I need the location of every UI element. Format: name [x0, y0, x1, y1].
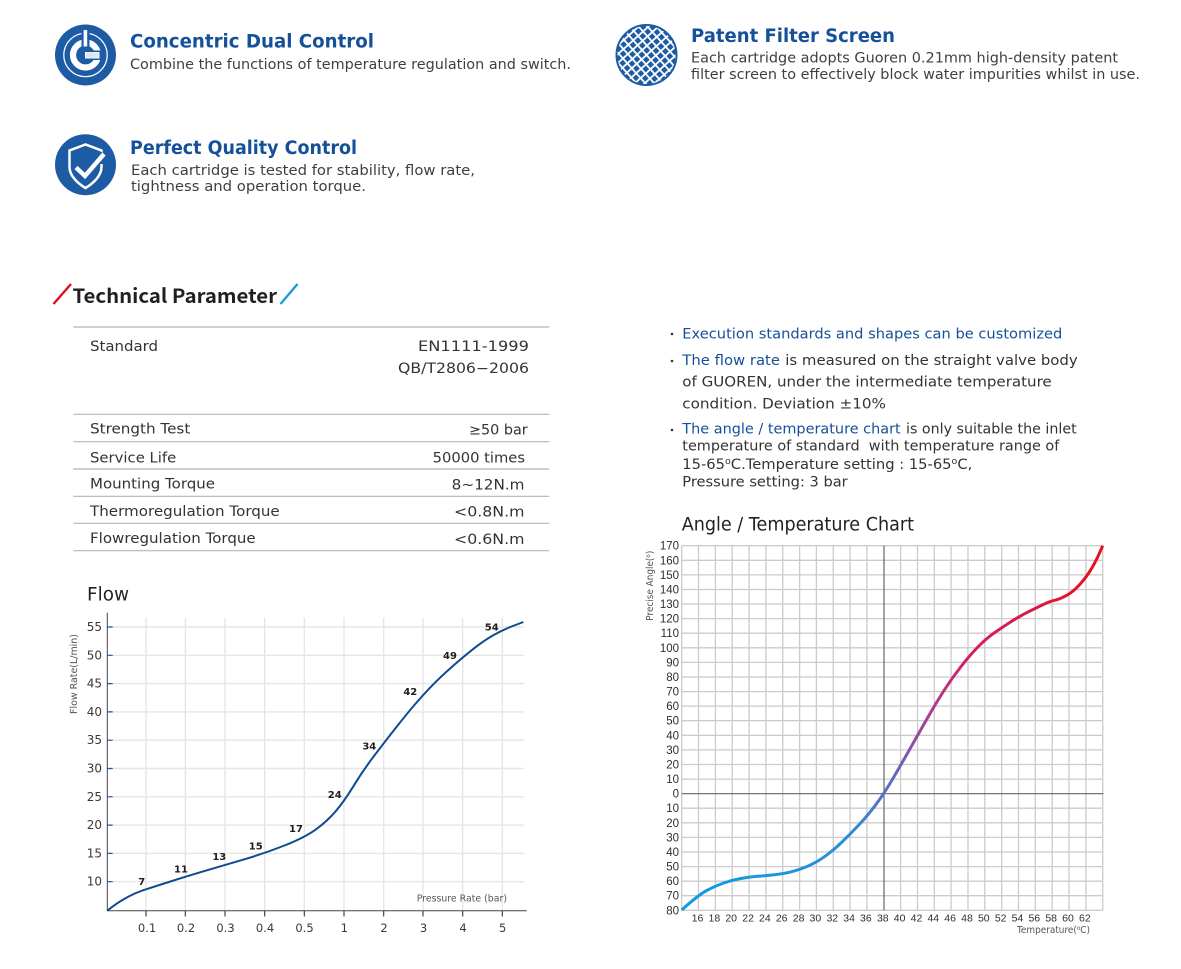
- data labels: 15: [249, 842, 263, 852]
- y axis labels: 40: [87, 705, 102, 719]
- x axis labels: 22: [742, 913, 754, 925]
- x axis labels: 46: [944, 913, 956, 925]
- table: technical parameters: <0.6N.m: [454, 532, 524, 548]
- x axis labels: 3: [420, 921, 427, 935]
- x axis labels: 58: [1045, 913, 1057, 925]
- y axis labels: 140: [660, 584, 679, 596]
- x axis labels: 30: [810, 913, 821, 925]
- y axis labels: 20: [666, 818, 679, 830]
- x axis title: o: [1077, 925, 1081, 932]
- notes list: is only suitable the inlet: [906, 422, 1077, 438]
- x axis labels: 4: [459, 921, 467, 935]
- y axis labels: 30: [87, 762, 102, 776]
- y axis labels: 20: [87, 818, 102, 832]
- notes list: is measured on the straight valve body: [785, 353, 1078, 369]
- notes list: Pressure setting: 3 bar: [682, 475, 848, 491]
- x axis labels: 28: [793, 913, 805, 925]
- notes list: The flow rate: [681, 353, 780, 369]
- y axis labels: 20: [666, 760, 679, 772]
- notes list: 15-65: [682, 457, 723, 473]
- y axis title: ): [645, 551, 656, 554]
- y axis labels: 15: [87, 846, 102, 860]
- icon: filter mesh: [616, 25, 676, 85]
- y axis labels: 10: [666, 774, 679, 786]
- x axis labels: 50: [978, 913, 990, 925]
- x axis labels: 54: [1012, 913, 1023, 925]
- notes list: Execution standards and shapes can be customized: [682, 326, 1062, 342]
- table: technical parameters: Mounting Torque: [90, 476, 215, 492]
- x axis labels: 52: [995, 913, 1007, 925]
- chart title: Angle / Temperature Chart: [682, 515, 914, 536]
- y axis labels: 35: [87, 733, 102, 747]
- y axis labels: 70: [666, 891, 679, 903]
- notes list: o: [952, 457, 958, 467]
- notes list: temperature of standard with temperature range of: [682, 439, 1060, 455]
- y axis labels: 25: [87, 790, 102, 804]
- y axis labels: 50: [87, 648, 102, 662]
- flow curve: [107, 622, 523, 911]
- y axis labels: 10: [666, 803, 679, 815]
- y axis labels: 10: [87, 875, 102, 889]
- x axis labels: 0.5: [295, 921, 314, 935]
- x axis labels: 26: [776, 913, 788, 925]
- notes list: of GUOREN, under the intermediate temperature: [682, 375, 1052, 391]
- x axis labels: 0.3: [216, 921, 235, 935]
- x axis labels: 0.1: [138, 921, 156, 935]
- y axis labels: 70: [666, 687, 679, 699]
- heading: Concentric Dual Control: [130, 32, 374, 52]
- y axis labels: 150: [660, 570, 679, 582]
- y axis labels: 110: [661, 628, 679, 640]
- feature: Perfect Quality Control: [55, 134, 475, 195]
- y axis labels: 40: [666, 730, 679, 742]
- x axis labels: 20: [725, 913, 737, 925]
- y axis title: Flow Rate(L/min): [69, 634, 80, 714]
- table: technical parameters: [73, 327, 549, 551]
- notes list: condition. Deviation ±10%: [682, 396, 886, 412]
- section title: Technical Parameter: Technical Parameter: [72, 280, 278, 309]
- feature: Patent Filter Screen: [616, 25, 1140, 85]
- data labels: 17: [289, 824, 303, 835]
- y axis labels: [660, 541, 679, 917]
- x axis labels: 1: [341, 921, 348, 935]
- x axis labels: 2: [380, 921, 388, 935]
- heading: Perfect Quality Control: [130, 138, 357, 159]
- notes list: The angle / temperature chart: [681, 422, 901, 438]
- y axis labels: 120: [660, 614, 679, 626]
- description: filter screen to effectively block water impurities whilst in use.: [691, 67, 1140, 83]
- y axis labels: 40: [666, 847, 679, 859]
- y axis title: o: [645, 554, 652, 558]
- x axis labels: 34: [843, 913, 855, 925]
- icon: shield with check mark: [55, 134, 116, 195]
- description: tightness and operation torque.: [131, 179, 366, 195]
- table: technical parameters: Thermoregulation Torque: [89, 504, 280, 520]
- table: technical parameters: 50000 times: [433, 450, 525, 466]
- data labels: 24: [328, 790, 342, 801]
- x axis labels: 38: [877, 913, 889, 925]
- x axis labels: 42: [911, 913, 922, 925]
- notes list: C,: [957, 457, 972, 473]
- x axis labels: 40: [894, 913, 906, 925]
- y axis labels: 160: [660, 555, 679, 567]
- x axis title: C): [1080, 925, 1090, 936]
- table: technical parameters: Standard: [90, 339, 158, 355]
- x axis labels: 62: [1079, 913, 1091, 925]
- table: technical parameters: Service Life: [90, 450, 176, 466]
- heading: Patent Filter Screen: [691, 26, 895, 47]
- x axis labels: 56: [1028, 913, 1040, 925]
- chart title: Flow: [87, 585, 129, 606]
- table: technical parameters: <0.8N.m: [454, 505, 524, 521]
- data labels: 11: [174, 864, 188, 876]
- data labels: 7: [138, 877, 145, 888]
- icon: concentric dual control: [55, 24, 116, 86]
- x axis labels: [138, 921, 506, 935]
- x axis labels: 0.2: [177, 921, 195, 935]
- data labels: 34: [362, 742, 376, 752]
- table: technical parameters: Flowregulation Torque: [90, 531, 256, 547]
- notes list: o: [725, 457, 731, 467]
- data labels: 49: [443, 651, 457, 662]
- y axis labels: 90: [666, 657, 679, 669]
- x axis labels: [692, 913, 1091, 925]
- y axis labels: 0: [673, 789, 679, 801]
- y axis labels: 80: [666, 905, 679, 917]
- angle curve: [682, 546, 1103, 910]
- y axis labels: [87, 620, 102, 889]
- description: Combine the functions of temperature regulation and switch.: [130, 57, 571, 73]
- description: Each cartridge adopts Guoren 0.21mm high-density patent: [691, 50, 1119, 66]
- data labels: 54: [485, 622, 499, 634]
- data labels: 13: [212, 852, 226, 863]
- y axis labels: 50: [666, 716, 679, 728]
- chart: Flow: [69, 585, 527, 935]
- y axis labels: 60: [666, 876, 679, 888]
- y axis labels: 45: [87, 677, 102, 691]
- x axis labels: 48: [961, 913, 973, 925]
- x axis labels: 18: [709, 913, 720, 925]
- description: Each cartridge is tested for stability, flow rate,: [131, 163, 475, 179]
- x axis labels: 44: [927, 913, 939, 925]
- table: technical parameters: Strength Test: [90, 421, 191, 437]
- y axis labels: 30: [666, 745, 679, 757]
- table: technical parameters: ≥50 bar: [469, 422, 528, 438]
- y axis labels: 60: [666, 701, 679, 713]
- notes list: [671, 326, 1078, 491]
- x axis labels: 24: [759, 913, 771, 925]
- chart: Angle / Temperature: [645, 515, 1104, 936]
- x axis labels: 60: [1062, 913, 1074, 925]
- description: [131, 163, 475, 195]
- y axis labels: 55: [87, 620, 102, 634]
- x axis labels: 16: [692, 913, 703, 925]
- y axis labels: 50: [666, 862, 679, 874]
- y axis labels: 130: [660, 599, 679, 611]
- x axis title: Pressure Rate (bar): [417, 893, 507, 904]
- table: technical parameters: EN1111-1999: [418, 339, 529, 355]
- x axis title: Temperature(: [1017, 925, 1081, 936]
- x axis labels: 36: [860, 913, 872, 925]
- data labels: 42: [403, 687, 417, 698]
- table: technical parameters: QB/T2806−2006: [398, 361, 529, 377]
- y axis labels: 80: [666, 672, 679, 684]
- feature: Concentric Dual Control: [55, 24, 571, 86]
- x axis labels: 32: [826, 913, 838, 925]
- data labels: [138, 622, 499, 888]
- y axis title: Precise Angle(: [645, 553, 656, 621]
- y axis labels: 100: [660, 643, 679, 655]
- x axis labels: 0.4: [256, 921, 274, 935]
- y axis labels: 30: [666, 832, 679, 844]
- x axis labels: 5: [499, 921, 506, 935]
- notes list: C.Temperature setting : 15-65: [731, 457, 952, 473]
- y axis labels: 170: [660, 541, 679, 553]
- table: technical parameters: 8~12N.m: [452, 477, 524, 493]
- description: [691, 50, 1140, 83]
